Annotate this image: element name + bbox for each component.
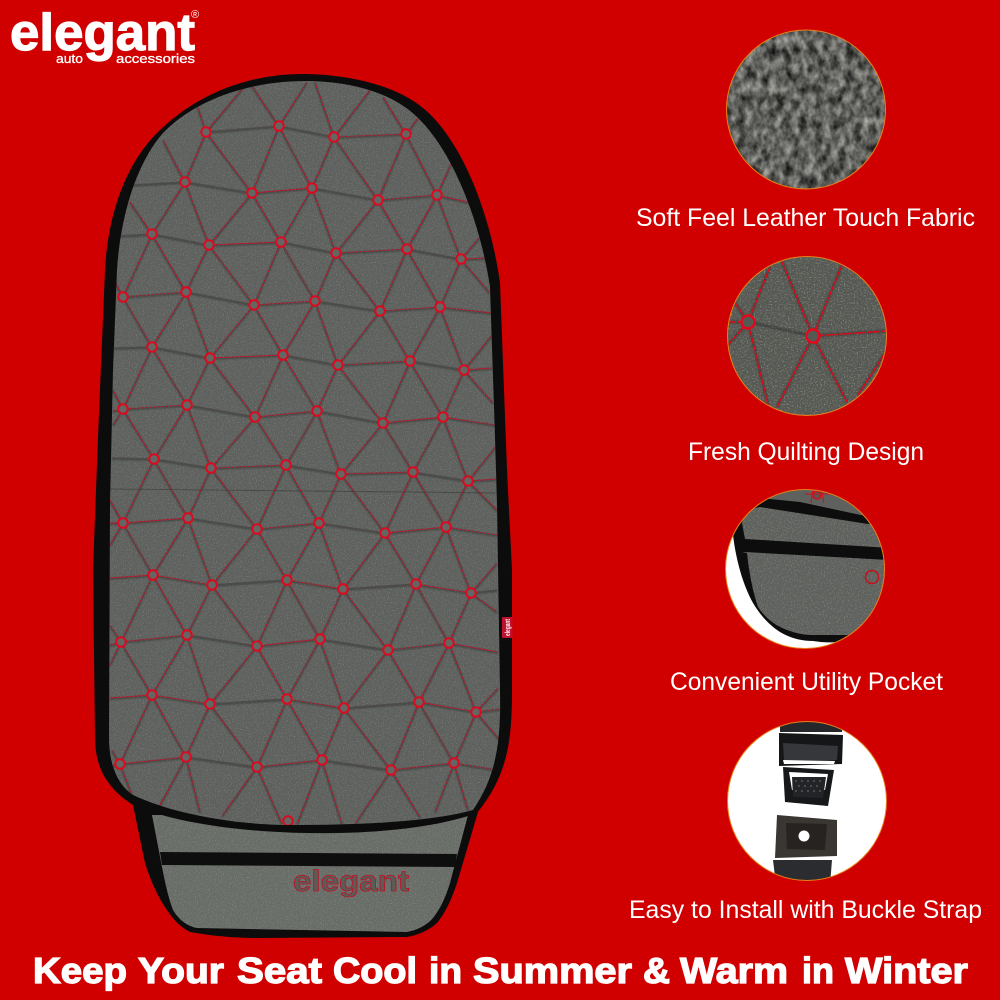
caption: fabric: Soft Feel Leather Touch Fabric (636, 204, 975, 232)
bottom headline: in (429, 950, 462, 991)
fold line (110, 489, 497, 493)
bottom headline: Your (138, 950, 224, 991)
bottom headline: & (643, 950, 670, 991)
caption: quilting: Fresh Quilting Design (688, 438, 924, 466)
bottom headline: Winter (845, 950, 968, 991)
feature circle: utility pocket (725, 489, 885, 649)
logo: elegant auto accessories: auto (56, 52, 83, 66)
logo: elegant auto accessories: elegant (10, 4, 195, 62)
upper strap and buckle (780, 722, 842, 732)
feature circle: buckle strap (727, 721, 887, 881)
lower buckle socket (775, 815, 837, 858)
bottom flap with pocket (133, 805, 478, 938)
seat cushion product (93, 74, 512, 938)
bottom headline: Warm (680, 950, 788, 991)
bottom headline: Cool (333, 950, 417, 991)
caption: buckle: Easy to Install with Buckle Strap (629, 896, 982, 924)
muted horizontal seams (112, 126, 497, 770)
embroidered flap logo: elegant (293, 865, 409, 898)
bottom headline: Seat (237, 950, 322, 991)
cushion black border (93, 74, 512, 833)
logo: elegant auto accessories: ® (191, 9, 199, 21)
feature circle: quilting close-up (725, 254, 890, 419)
quilting creases (110, 83, 500, 825)
cushion quilted fabric (100, 75, 510, 835)
caption: pocket: Convenient Utility Pocket (670, 668, 943, 696)
bottom headline: Keep (33, 950, 127, 991)
red stitching (110, 82, 500, 824)
bottom headline: Summer (473, 950, 632, 991)
red side tag (502, 617, 512, 638)
bottom headline (33, 950, 968, 991)
red side tag: elegant (505, 619, 512, 636)
logo: elegant auto accessories: accessories (116, 52, 195, 66)
bottom headline: in (802, 950, 834, 991)
pocket band (160, 852, 457, 867)
stitched ring nodes (120, 126, 476, 821)
feature circle: fabric close-up (725, 28, 890, 193)
